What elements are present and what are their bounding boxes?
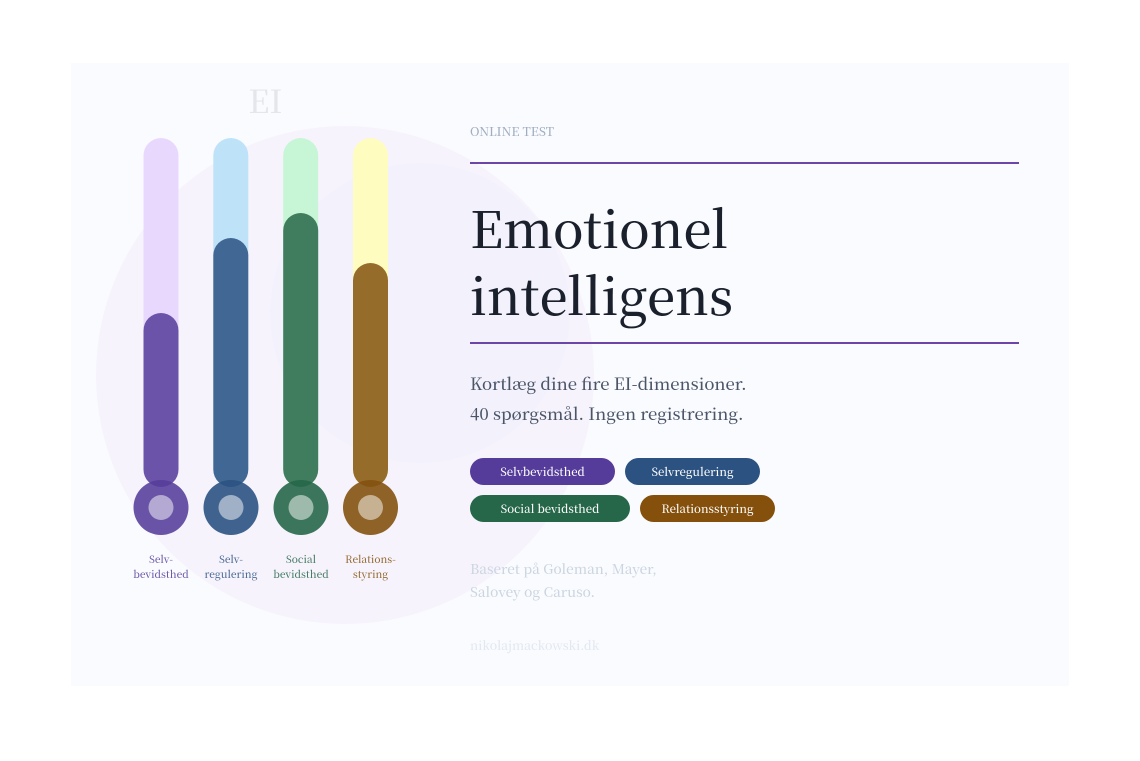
thermometer: Relationsstyring (343, 138, 398, 581)
website: nikolajmackowski.dk (470, 636, 599, 654)
thermometer: Selvregulering: Selv- (219, 551, 243, 566)
pill: Social bevidsthed (470, 495, 630, 522)
pill: Selvbevidsthed: Selvbevidsthed (500, 464, 585, 480)
thermometer: Selvbevidsthed: Selv- (149, 551, 173, 566)
thermometer: Selvregulering: regulering (205, 566, 258, 581)
thermometer: Selvbevidsthed (133, 138, 189, 581)
thermometer: Social bevidsthed: Social (286, 551, 317, 566)
title: Emotionel (470, 191, 728, 263)
thermometer: Social bevidsthed (273, 138, 329, 581)
thermometer: Selvbevidsthed: bevidsthed (133, 566, 189, 581)
subtitle (470, 371, 747, 425)
pill: Selvregulering (625, 458, 760, 485)
thermometer: Social bevidsthed: bevidsthed (273, 566, 329, 581)
subtitle: 40 spørgsmål. Ingen registrering. (470, 401, 743, 425)
pill tags (470, 458, 775, 522)
thermometer: Relationsstyring: styring (353, 566, 388, 581)
pill: Selvbevidsthed (470, 458, 615, 485)
pill: Relationsstyring: Relationsstyring (661, 501, 754, 517)
eyebrow label: ONLINE TEST (470, 122, 554, 140)
source note: Salovey og Caruso. (470, 581, 595, 601)
title (470, 191, 733, 330)
pill: Social bevidsthed: Social bevidsthed (501, 501, 599, 517)
subtitle: Kortlæg dine fire EI-dimensioner. (470, 371, 747, 395)
background circles (96, 126, 594, 624)
source note (470, 558, 657, 601)
watermark EI: EI (248, 77, 283, 123)
thermometer: Selvregulering (204, 138, 258, 581)
title: intelligens (470, 258, 733, 330)
thermometer: Relationsstyring: Relations- (345, 551, 396, 566)
pill: Selvregulering: Selvregulering (651, 464, 734, 480)
pill: Relationsstyring (640, 495, 775, 522)
panel: background card (71, 63, 1069, 686)
source note: Baseret på Goleman, Mayer, (470, 558, 657, 578)
